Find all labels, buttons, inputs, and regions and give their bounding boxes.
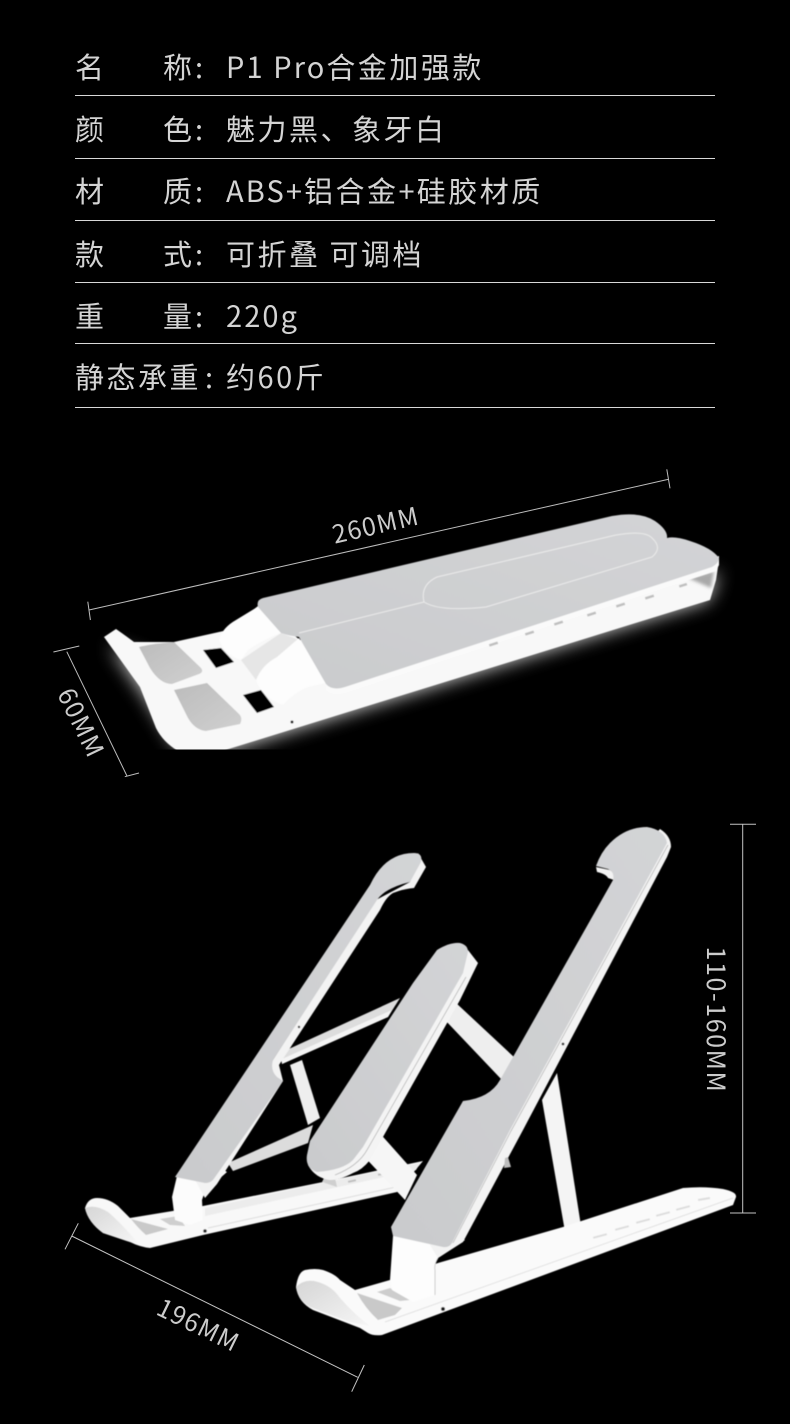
- row: style: [75, 232, 424, 274]
- folded stand: [104, 514, 719, 752]
- rear arm white edge: [195, 853, 426, 1198]
- screw dots: [290, 720, 294, 724]
- row: name: :: [195, 45, 206, 87]
- row: colour: 魅力黑、象牙白: [226, 107, 447, 149]
- row: style: :: [195, 232, 206, 274]
- middle panel: [307, 943, 478, 1187]
- row: material: ABS+铝合金+硅胶材质: [226, 169, 543, 211]
- dimension: 196MM depth: 196MM: [151, 1289, 246, 1360]
- row: weight: :: [195, 294, 206, 336]
- hinges: [222, 608, 256, 632]
- dimension: 260MM length: 260MM: [329, 497, 423, 552]
- rear arm foot: [172, 1160, 227, 1225]
- front arm white edge: [430, 829, 671, 1258]
- row: static load: :: [205, 355, 216, 397]
- notches: [489, 583, 687, 647]
- front arm foot: [390, 1225, 465, 1302]
- shaded layer gap at right end: [688, 571, 714, 588]
- row: weight: 重: [75, 294, 107, 336]
- glow behind folded stand: [110, 572, 719, 752]
- black holes: [203, 648, 234, 668]
- row: name: 名: [75, 45, 107, 87]
- row: style: 式: [163, 232, 195, 274]
- rear arm panel: [175, 853, 421, 1183]
- standing stand: [85, 827, 736, 1335]
- dimension: 260MM length: [88, 469, 670, 620]
- row: style: 款: [75, 232, 107, 274]
- dimension: 110-160MM height: [699, 824, 756, 1213]
- panel white rim: [538, 555, 720, 625]
- row: material: [75, 169, 543, 211]
- front base: [296, 1187, 736, 1335]
- front strut: [542, 1073, 584, 1245]
- dimension: 60MM width: [50, 646, 139, 777]
- row: name: [75, 45, 484, 87]
- front arm notch lip: [596, 867, 614, 880]
- row: weight: 220g: [226, 294, 299, 336]
- row: static load: [75, 355, 326, 397]
- row: material: :: [195, 169, 206, 211]
- dimension: 60MM width: 60MM: [50, 681, 114, 764]
- rear crossbars: [228, 998, 400, 1171]
- row: weight: 量: [163, 294, 195, 336]
- rear arm: [172, 853, 426, 1225]
- row: style: 可折叠 可调档: [226, 232, 424, 274]
- panel seam and pill outline: [299, 533, 658, 633]
- front arm panel: [391, 827, 667, 1247]
- diagonal strut: [358, 1002, 515, 1200]
- rear stand base: [85, 1161, 423, 1248]
- foot pads: [139, 642, 202, 684]
- upper panel: [258, 514, 719, 688]
- dimension: 196MM depth: [65, 1223, 364, 1392]
- front arm: [390, 827, 671, 1302]
- row: static load: 静态承重: [75, 355, 201, 397]
- row: material: 质: [163, 169, 195, 211]
- row: material: 材: [75, 169, 107, 211]
- row: static load: 约60斤: [226, 355, 326, 397]
- row: weight: [75, 294, 299, 336]
- row: colour: :: [195, 107, 206, 149]
- row: colour: [75, 107, 447, 149]
- row: colour: 色: [163, 107, 195, 149]
- strip between hinges: [241, 633, 299, 680]
- dimension: 110-160MM height: 110-160MM: [699, 947, 735, 1093]
- row: colour: 颜: [75, 107, 107, 149]
- row: name: P1 Pro合金加强款: [226, 45, 484, 87]
- row: name: 称: [163, 45, 195, 87]
- specification table: [75, 45, 715, 408]
- folded base: [104, 560, 719, 751]
